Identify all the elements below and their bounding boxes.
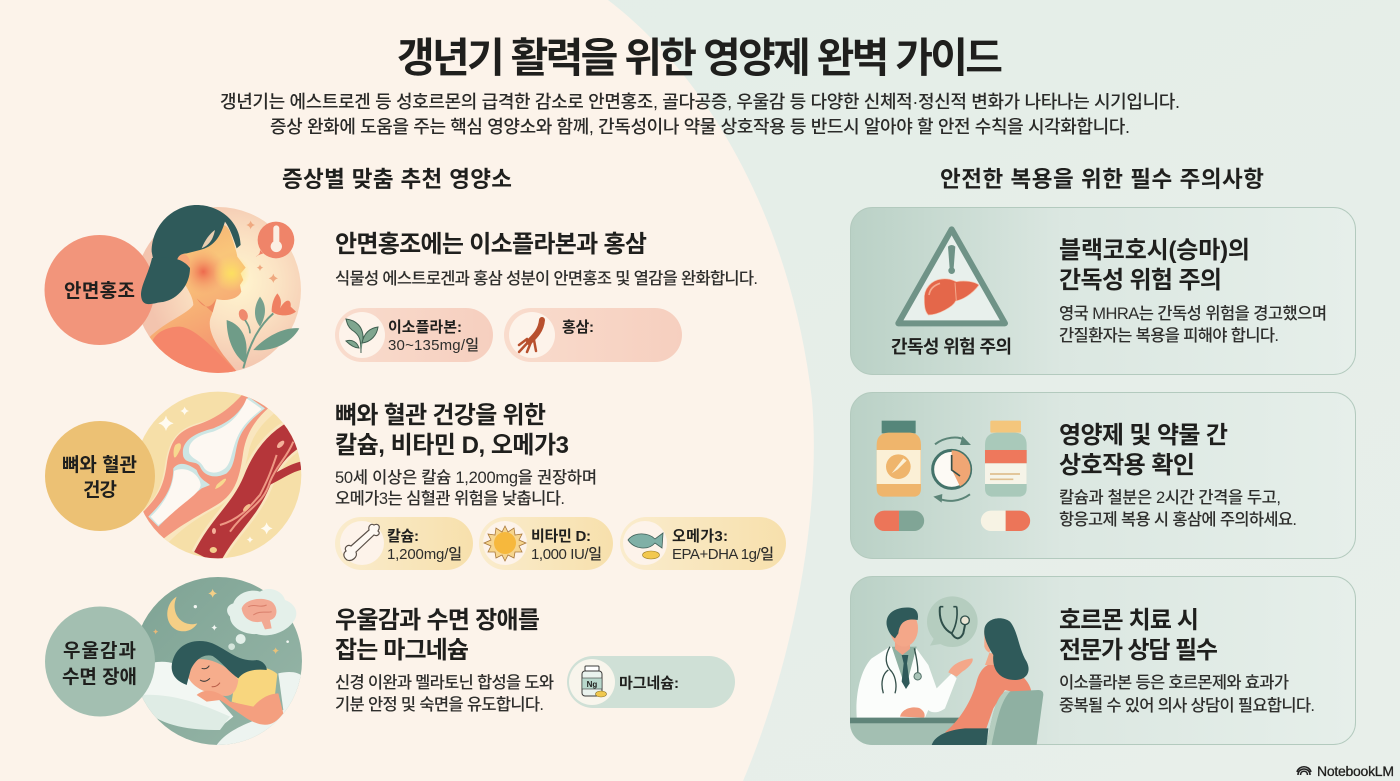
pill: magnesium: 마그네슘: — [619, 675, 679, 692]
pill: calcium: 1,200mg/일 — [387, 546, 462, 563]
illustration: sleeping woman — [134, 577, 303, 747]
intro text: 갱년기는 에스트로겐 등 성호르몬의 급격한 감소로 안면홍조, 골다공증, 우울감 등 다양한 신체적·정신적 변화가 나타나는 시기입니다. — [220, 92, 1180, 112]
panel: mood and sleep — [45, 577, 735, 747]
icon: leaf — [346, 319, 378, 353]
label: 우울감과 수면 장애: 우울감과 — [63, 640, 136, 662]
heading — [1059, 237, 1250, 294]
panel: bones and vessels — [45, 392, 786, 570]
icon: bone — [344, 524, 379, 560]
panel: drug interaction — [850, 392, 1356, 558]
title: 갱년기 활력을 위한 영양제 완벽 가이드 — [397, 35, 1003, 81]
pill: isoflavone: 30~135mg/일 — [388, 337, 479, 354]
label: 우울감과 수면 장애: 수면 장애 — [62, 666, 137, 688]
panel: hormone therapy consult — [850, 576, 1356, 747]
description — [335, 673, 554, 714]
pill: vitamin D: 1,000 IU/일 — [531, 546, 602, 563]
heading: 호르몬 치료 시 — [1059, 607, 1199, 634]
description: 기분 안정 및 숙면을 유도합니다. — [335, 695, 544, 714]
heading: 칼슘, 비타민 D, 오메가3 — [335, 432, 569, 459]
heading: 간독성 위험 주의 — [1059, 267, 1222, 294]
background: cream curved left side — [0, 0, 814, 781]
label: 안면홍조 — [44, 235, 154, 345]
label: 뼈와 혈관 건강: 건강 — [83, 479, 117, 501]
pill: red ginseng — [504, 308, 682, 362]
description: 간질환자는 복용을 피해야 합니다. — [1059, 326, 1279, 345]
description: 중복될 수 있어 의사 상담이 필요합니다. — [1059, 696, 1315, 715]
label: 우울감과 수면 장애 — [45, 606, 155, 716]
illustration: doctor and patient — [850, 596, 1043, 747]
heading: 뼈와 혈관 건강을 위한 — [335, 402, 546, 429]
description: 항응고제 복용 시 홍삼에 주의하세요. — [1059, 510, 1297, 529]
intro text — [220, 92, 1180, 137]
icon: ginseng root — [519, 320, 542, 352]
label: 안면홍조: 안면홍조 — [64, 280, 135, 302]
icon: fish and capsule — [628, 533, 663, 559]
description: 오메가3는 심혈관 위험을 낮춥니다. — [335, 489, 565, 508]
description: 영국 MHRA는 간독성 위험을 경고했으며 — [1059, 304, 1327, 323]
heading — [1059, 422, 1228, 479]
label: 뼈와 혈관 건강 — [45, 421, 155, 531]
heading: 잡는 마그네슘 — [335, 637, 469, 664]
description: 신경 이완과 멜라토닌 합성을 도와 — [335, 673, 554, 692]
icon: sun — [484, 526, 526, 561]
illustration: hair bun — [141, 258, 190, 304]
icon: supplement bottle: Ng — [587, 680, 597, 689]
icon: supplement bottle — [582, 666, 606, 697]
description — [335, 468, 597, 508]
icon caption: 간독성 위험 주의 — [891, 337, 1012, 357]
icon: bottles, clock and capsules — [874, 421, 1030, 531]
pill: omega-3: 오메가3: — [672, 528, 728, 545]
heading: 전문가 상담 필수 — [1059, 637, 1218, 664]
description — [1059, 673, 1315, 715]
pill: red ginseng: 홍삼: — [562, 319, 594, 336]
pill: magnesium — [567, 656, 735, 708]
pill: omega-3 — [620, 517, 786, 570]
watermark: NotebookLM: NotebookLM — [1317, 763, 1394, 779]
description: 칼슘과 철분은 2시간 간격을 두고, — [1059, 488, 1281, 507]
pill: omega-3: EPA+DHA 1g/일 — [672, 546, 774, 563]
pill: isoflavone — [335, 308, 493, 362]
description: 이소플라본 등은 호르몬제와 효과가 — [1059, 673, 1289, 692]
description: 50세 이상은 칼슘 1,200mg을 권장하며 — [335, 468, 597, 487]
heading — [1059, 607, 1218, 664]
description — [1059, 304, 1327, 345]
heading: 우울감과 수면 장애를 — [335, 607, 540, 634]
heading: 안면홍조에는 이소플라본과 홍삼 — [335, 231, 647, 258]
heading — [335, 607, 540, 664]
icon: liver warning triangle — [898, 229, 1005, 323]
left section heading: 증상별 맞춤 추천 영양소 — [282, 167, 512, 192]
heading: 상호작용 확인 — [1059, 452, 1195, 479]
description — [1059, 488, 1297, 529]
illustration: joint and blood vessel — [135, 392, 307, 558]
label: 뼈와 혈관 건강: 뼈와 혈관 — [62, 454, 137, 476]
pill: calcium: 칼슘: — [387, 528, 419, 545]
pill: vitamin D: 비타민 D: — [531, 528, 591, 545]
pill: calcium — [335, 517, 473, 570]
illustration: woman with hot flush — [135, 205, 301, 375]
heading — [335, 402, 569, 459]
panel: hot flashes — [44, 205, 758, 375]
description: 식물성 에스트로겐과 홍삼 성분이 안면홍조 및 열감을 완화합니다. — [335, 269, 758, 288]
heading: 블랙코호시(승마)의 — [1059, 237, 1250, 264]
panel: black cohosh warning — [850, 208, 1356, 374]
pill: isoflavone: 이소플라본: — [388, 319, 462, 336]
intro text: 증상 완화에 도움을 주는 핵심 영양소와 함께, 간독성이나 약물 상호작용 등 반드시 알아야 할 안전 수칙을 시각화합니다. — [270, 117, 1130, 137]
pill: vitamin D — [479, 517, 613, 570]
heading: 영양제 및 약물 간 — [1059, 422, 1228, 449]
right section heading: 안전한 복용을 위한 필수 주의사항 — [940, 167, 1264, 192]
